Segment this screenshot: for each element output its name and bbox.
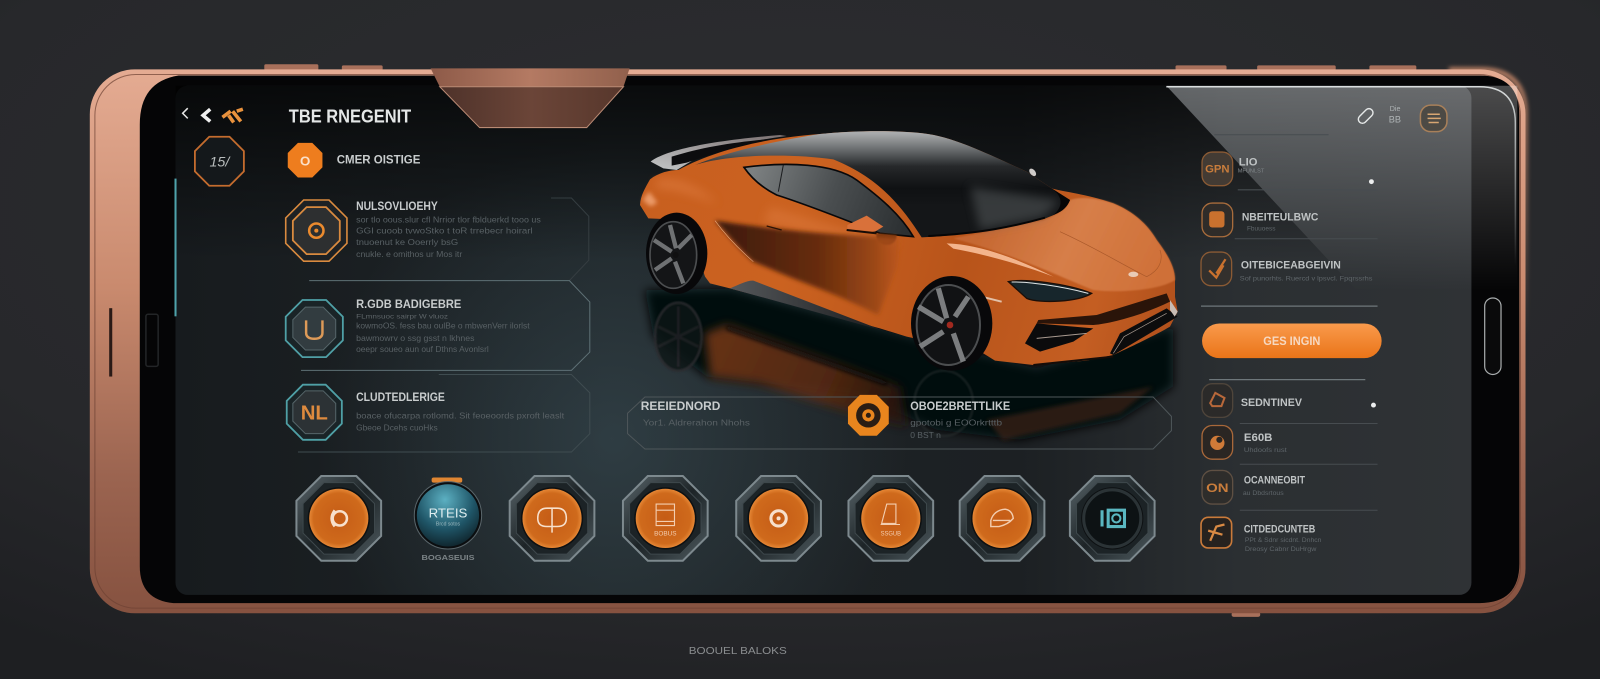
button 6 <box>848 476 933 561</box>
menu row 6 <box>1202 470 1305 504</box>
center info panel: REEIEDNORD <box>641 400 720 413</box>
hardware buttons <box>264 64 1416 617</box>
menu row 6: ON <box>1206 481 1229 495</box>
screen panel <box>174 86 1517 595</box>
button 4: BOBUS <box>654 531 677 538</box>
button 1 <box>296 476 381 561</box>
speed badge: 15/ <box>209 154 231 170</box>
feature 2 <box>286 298 530 357</box>
feature 2: kowmoOS. fess bau oulBe o mbwenVerr ilorlst <box>356 321 530 331</box>
car reflection <box>645 288 1173 440</box>
button 7 <box>960 476 1044 561</box>
center info panel: 0 BST n <box>910 430 941 440</box>
menu row 2: NBEITEULBWC <box>1242 211 1318 223</box>
feature 1: GGI cuoob tvwoStko t toR trrebecr hoirarl <box>356 226 533 236</box>
menu row 7: CITDEDCUNTEB <box>1244 524 1315 536</box>
feature 3 <box>287 385 565 440</box>
menu row 3: OITEBICEABGEIVIN <box>1241 259 1341 271</box>
menu row 2: Fbuuoess <box>1247 226 1276 233</box>
button 2 <box>414 478 482 562</box>
menu row 1: MFUNLST <box>1238 168 1264 174</box>
feature 2: bawmowrv o ssg gsst n lkhnes <box>356 333 475 343</box>
hood details <box>947 232 1161 277</box>
menu row 7 <box>1201 517 1322 553</box>
menu row 3 <box>1201 252 1373 286</box>
button 5 <box>736 476 821 561</box>
subtitle with orange badge: CMER OISTIGE <box>337 153 421 166</box>
center info panel <box>628 395 1171 449</box>
icon: orange target <box>848 395 889 436</box>
button 2: RTEIS <box>429 505 468 520</box>
rear wheel <box>646 213 707 294</box>
feature 3: Gbeoe Dcehs cuoHks <box>356 423 438 433</box>
feature 3: boace ofucarpa rotlomd. Sit feoeoords pxroft leaslt <box>356 410 565 420</box>
feature 1: tnuoenut ke Ooerrly bsG <box>356 237 458 247</box>
side scoop <box>715 221 900 315</box>
button 8 <box>1070 476 1155 561</box>
top notch <box>431 68 630 128</box>
side sensor <box>146 314 158 366</box>
nav icons <box>183 108 243 122</box>
cta button <box>1202 323 1382 358</box>
menu row 4: SEDNTINEV <box>1241 397 1303 409</box>
phone frame <box>90 64 1526 617</box>
menu row 6: au Dbdsrtous <box>1243 490 1284 497</box>
rear highlights <box>643 192 657 207</box>
menu row 2 <box>1202 203 1318 237</box>
headlight <box>982 281 1092 302</box>
glare <box>1166 86 1517 291</box>
panel outlines <box>298 198 590 452</box>
glass canopy <box>695 131 1070 237</box>
home pill button <box>1485 298 1501 374</box>
subtitle with orange badge <box>288 143 421 178</box>
feature 1: NULSOVLIOEHY <box>356 200 438 213</box>
car body <box>640 131 1178 365</box>
top right tools <box>1357 105 1447 132</box>
feature 2: oeepr soueo aun ouf Dthns Avonlsrl <box>356 344 489 354</box>
speed badge <box>195 137 244 186</box>
top right tools: BB <box>1389 114 1401 124</box>
car illustration <box>640 131 1178 440</box>
button 2: Brcd sotos <box>436 522 460 528</box>
feature 3: CLUDTEDLERIGE <box>356 391 445 404</box>
title: TBE RNEGENIT <box>289 105 412 126</box>
center info panel: gpotobi g EOOrkrtttb <box>910 418 1002 428</box>
menu row 5 <box>1202 426 1287 459</box>
menu row 1 <box>1202 152 1374 186</box>
feature 2: FLmnsuoc sairpr W vluoz <box>356 313 448 320</box>
feature 1 <box>286 200 542 261</box>
menu row 3: Sof punorhts. Ruercd v lpsvcl. Fpqrssrhs <box>1240 276 1373 283</box>
hood <box>953 198 1175 291</box>
right menu <box>1201 135 1382 553</box>
sill <box>730 281 883 331</box>
center info panel: Yor1. Aldrerahon Nhohs <box>643 418 751 428</box>
side window <box>744 164 913 237</box>
front grille <box>1025 293 1178 365</box>
menu row 7: PPt & Sdnr sicdnt. Dnhcn <box>1245 537 1322 544</box>
button 4 <box>623 476 708 561</box>
panel: feature list <box>286 198 590 452</box>
menu row 4 <box>1202 384 1376 417</box>
teal accent <box>174 179 177 316</box>
mirror <box>847 216 897 245</box>
speaker slot <box>109 308 112 377</box>
footer caption: BOOUEL BALOKS <box>689 646 787 657</box>
button 3 <box>510 476 594 561</box>
button 6: SSGUB <box>881 531 901 538</box>
row of round buttons <box>296 476 1155 562</box>
icon: round badge <box>1420 105 1447 132</box>
top right tools: Die <box>1390 105 1401 113</box>
feature 3: NL <box>301 402 328 424</box>
icon: pill <box>1357 107 1375 125</box>
subtitle with orange badge: O <box>300 153 310 168</box>
feature 2: R.GDB BADIGEBRE <box>356 298 461 311</box>
menu row 5: E60B <box>1244 432 1272 444</box>
menu row 1: GPN <box>1205 163 1230 175</box>
menu row 6: OCANNEOBIT <box>1244 475 1305 487</box>
button 2: BOGASEUIS <box>421 553 474 562</box>
feature 1: cnukle. e omithos ur Mos itr <box>356 249 462 259</box>
center info panel: OBOE2BRETTLIKE <box>910 400 1010 413</box>
menu row 1: LIO <box>1239 156 1258 168</box>
menu row 7: Dreosy Cabnr DuHrgw <box>1245 546 1317 553</box>
cta button: GES INGIN <box>1263 334 1321 348</box>
spoiler <box>651 135 787 170</box>
menu row 5: Uhdoofs rust <box>1244 447 1287 454</box>
front wheel <box>911 276 992 371</box>
feature 1: sor tlo oous.slur cfl Nrrior tlor fblduerkd tooo us <box>356 214 542 224</box>
